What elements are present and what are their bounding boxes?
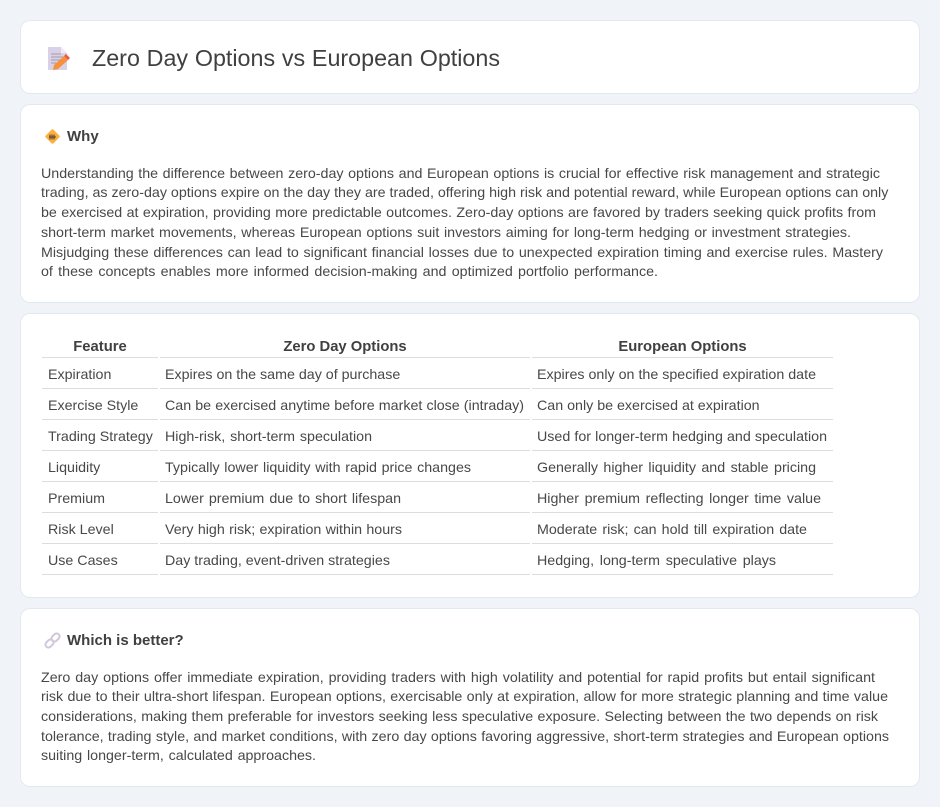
table: feature comparison: Premium <box>48 491 105 507</box>
table: feature comparison: Day trading, event-driven strategies <box>165 553 390 569</box>
icon: document with pencil <box>48 47 70 70</box>
panel: title <box>20 20 920 94</box>
heading: which is better: Which is better? <box>67 632 184 649</box>
text block: why explanation: Understanding the difference between zero-day options and European options is crucial for effective risk management and strategic <box>41 166 880 182</box>
text block: why explanation <box>41 166 888 280</box>
table: feature comparison: Can only be exercised at expiration <box>537 398 760 414</box>
icon: orange diamond sign <box>45 129 60 144</box>
table: feature comparison: Higher premium reflecting longer time value <box>537 491 821 507</box>
text block: verdict: considerations, making them preferable for investors seeking less speculative exposure. Selecting between the two depends on risk <box>41 709 878 725</box>
table: feature comparison: Very high risk; expiration within hours <box>165 522 402 538</box>
table: feature comparison: Zero Day Options <box>283 339 407 355</box>
text block: why explanation: trading, as zero-day options expire on the day they are traded, offering high risk and potential reward, while European options can only <box>41 185 888 201</box>
table: feature comparison: Typically lower liquidity with rapid price changes <box>165 460 471 476</box>
table: feature comparison: Liquidity <box>48 460 100 476</box>
table: feature comparison: European Options <box>618 339 747 355</box>
table: feature comparison: Exercise Style <box>48 398 138 414</box>
table: feature comparison: Trading Strategy <box>48 429 153 445</box>
table: feature comparison: Use Cases <box>48 553 118 569</box>
heading: why: Why <box>67 128 99 145</box>
table: feature comparison: Lower premium due to short lifespan <box>165 491 401 507</box>
table: feature comparison: Expiration <box>48 367 111 383</box>
table: feature comparison: Used for longer-term hedging and speculation <box>537 429 827 445</box>
table: feature comparison: Moderate risk; can hold till expiration date <box>537 522 807 538</box>
text block: verdict <box>41 670 889 764</box>
table: feature comparison: Can be exercised anytime before market close (intraday) <box>165 398 524 414</box>
text block: verdict: tolerance, trading style, and market conditions, with zero day options favoring aggressive, short-term strategies and European options <box>41 729 889 745</box>
text block: verdict: Zero day options offer immediate expiration, providing traders with high volatility and potential for rapid profits but entail significant <box>41 670 875 686</box>
panel: comparison table <box>20 313 920 598</box>
heading: page title: Zero Day Options vs European Options <box>92 45 500 71</box>
panel: why <box>20 104 920 303</box>
text block: why explanation: be exercised at expiration, providing more predictable outcomes. Zero-day options are favored by traders seeking quick profits from <box>41 205 876 221</box>
table: feature comparison: Generally higher liquidity and stable pricing <box>537 460 816 476</box>
table: feature comparison: Expires only on the specified expiration date <box>537 367 816 383</box>
text block: why explanation: Misjudging these differences can lead to significant financial losses due to unexpected expiration timing and exercise rules. Mastery <box>41 245 883 261</box>
text block: verdict: suiting longer-term, calculated approaches. <box>41 748 316 764</box>
table: feature comparison: Hedging, long-term speculative plays <box>537 553 776 569</box>
text block: verdict: risk due to their ultra-short lifespan. European options, exercisable only at expiration, allow for more strategic planning and time value <box>41 689 888 705</box>
text block: why explanation: of these concepts enables more informed decision-making and optimized portfolio performance. <box>41 264 658 280</box>
table: feature comparison: Risk Level <box>48 522 114 538</box>
table: feature comparison <box>42 339 833 575</box>
panel: which is better <box>20 608 920 787</box>
table: feature comparison: Expires on the same day of purchase <box>165 367 400 383</box>
table: feature comparison: Feature <box>73 339 127 355</box>
text block: why explanation: short-term market movements, whereas European options suit investors aiming for long-term hedging or investment strategies. <box>41 225 851 241</box>
table: feature comparison: High-risk, short-term speculation <box>165 429 372 445</box>
icon: chain link <box>44 632 60 648</box>
